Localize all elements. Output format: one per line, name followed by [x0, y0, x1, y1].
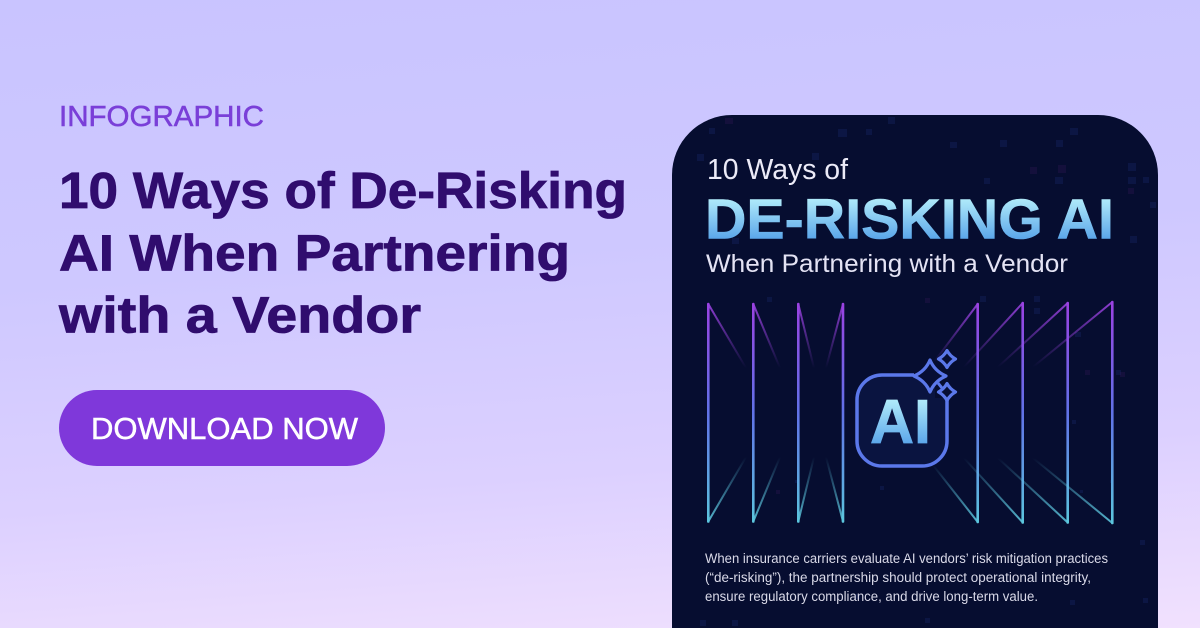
icon: AI chip with sparkles: AI [870, 388, 931, 457]
panel body text: When insurance carriers evaluate AI vendors’ risk mitigation practices [705, 551, 1108, 566]
main heading: with a Vendor [58, 286, 421, 344]
download button [59, 390, 385, 466]
panel: infographic preview [672, 115, 1158, 628]
panel title: DE-RISKING AI: DE-RISKING AI [705, 188, 1114, 252]
panel title line: 10 Ways of: 10 Ways of [707, 154, 849, 186]
panel subtitle: When Partnering with a Vendor [706, 250, 1068, 278]
left neon frames [708, 304, 843, 522]
main heading: 10 Ways of De-Risking [59, 162, 627, 219]
main heading: AI When Partnering [59, 224, 570, 282]
main heading [58, 162, 627, 344]
download button: DOWNLOAD NOW [91, 412, 358, 446]
panel body text [705, 551, 1108, 604]
panel body text: ensure regulatory compliance, and drive long-term value. [705, 589, 1038, 604]
panel body text: (“de-risking”), the partnership should protect operational integrity, [705, 570, 1091, 585]
eyebrow label: INFOGRAPHIC [59, 101, 264, 133]
icon: AI chip with sparkles [857, 350, 956, 466]
right neon frames [933, 302, 1112, 523]
